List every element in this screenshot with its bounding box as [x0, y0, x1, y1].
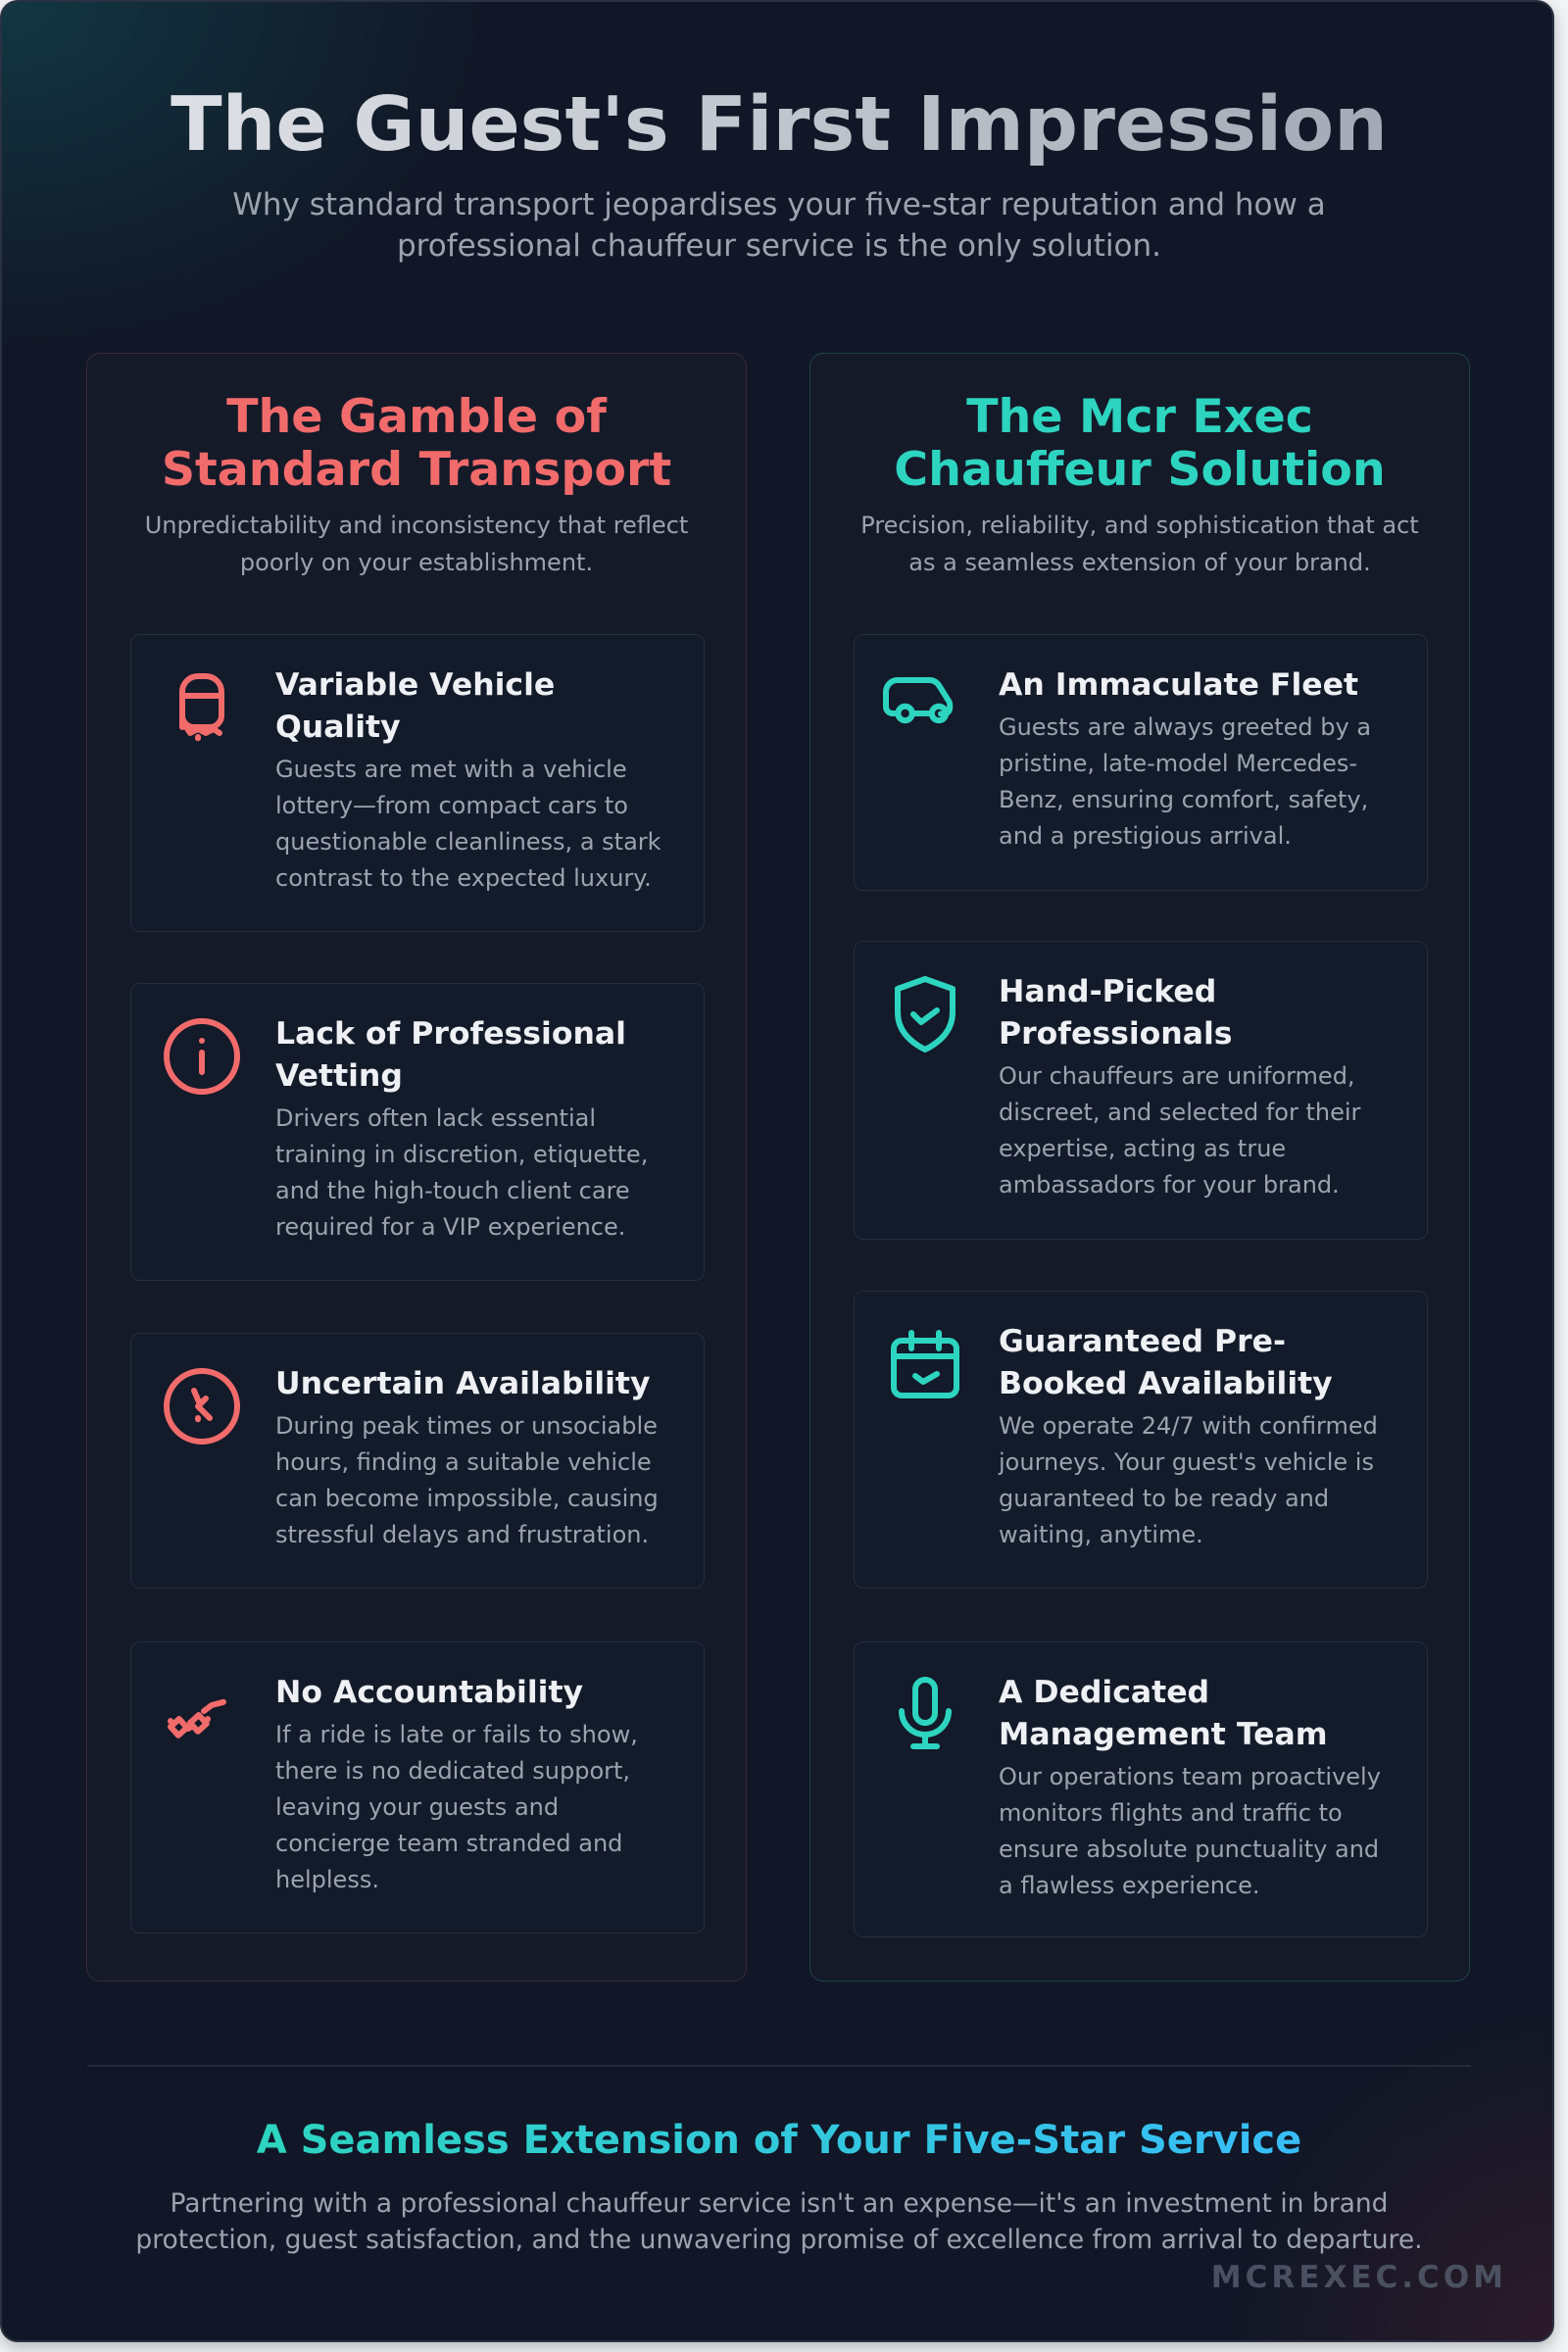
card: pre-booked availability: We operate 24/7 with confirmed journeys. Your guest's vehicle is guaranteed to be ready and waiting, anytime. — [999, 1412, 1378, 1548]
card: management team: A Dedicated Management Team — [999, 1675, 1328, 1752]
card: lack of vetting — [130, 983, 705, 1281]
icon: info circle — [164, 1018, 240, 1095]
card: hand-picked professionals: Hand-Picked Professionals — [999, 974, 1233, 1052]
card: variable vehicle quality: Guests are met with a vehicle lottery—from compact cars to questionable cleanliness, a stark contrast to the expected luxury. — [275, 756, 662, 892]
panel: standard transport — [86, 353, 747, 1982]
panel heading: solution: The Mcr Exec — [966, 390, 1313, 444]
icon: calendar check — [891, 1330, 959, 1398]
card: uncertain availability — [130, 1333, 705, 1589]
footer text: Partnering with a professional chauffeur service isn't an expense—it's an investment in brand protection, guest satisfaction, and the unwavering promise of excellence from arrival to departure. — [135, 2188, 1423, 2255]
icon: microphone — [899, 1677, 952, 1749]
panel subheading: Unpredictability and inconsistency that reflect poorly on your establishment. — [145, 512, 688, 576]
card: immaculate fleet — [854, 634, 1428, 891]
footer heading: A Seamless Extension of Your Five-Star Service — [257, 2118, 1301, 2163]
card: pre-booked availability — [854, 1291, 1428, 1589]
card: no accountability: If a ride is late or fails to show, there is no dedicated support, leaving your guests and concierge team stranded and helpless. — [275, 1721, 638, 1893]
card: no accountability — [130, 1642, 705, 1934]
panel: chauffeur solution — [809, 353, 1470, 1982]
card: uncertain availability: During peak times or unsociable hours, finding a suitable vehicle can become impossible, causing stressful delays and frustration. — [275, 1412, 659, 1548]
card: management team: Our operations team proactively monitors flights and traffic to ensure absolute punctuality and a flawless experience. — [999, 1763, 1381, 1899]
card: immaculate fleet: Guests are always greeted by a pristine, late-model Mercedes-Benz, ensuring comfort, safety, and a prestigious arrival. — [999, 713, 1371, 850]
panel subheading: Precision, reliability, and sophistication that act as a seamless extension of your brand. — [860, 512, 1419, 576]
icon: car — [883, 677, 953, 723]
card: hand-picked professionals — [854, 941, 1428, 1240]
card: management team — [854, 1642, 1428, 1937]
title: The Guest's First Impression — [171, 81, 1388, 169]
icon: broken clock — [164, 1368, 240, 1445]
icon: broken glasses — [168, 1699, 226, 1739]
panel heading: solution: Chauffeur Solution — [894, 443, 1386, 497]
card: uncertain availability: Uncertain Availability — [275, 1366, 651, 1401]
card: pre-booked availability: Guaranteed Pre-Booked Availability — [999, 1324, 1333, 1401]
card: immaculate fleet: An Immaculate Fleet — [999, 667, 1358, 703]
panel heading: gamble: Standard Transport — [162, 443, 671, 497]
card: no accountability: No Accountability — [275, 1675, 583, 1710]
card: lack of vetting: Drivers often lack essential training in discretion, etiquette, and the high-touch client care required for a VIP experience. — [275, 1104, 648, 1241]
card: lack of vetting: Lack of Professional Vetting — [275, 1016, 626, 1094]
card: variable vehicle quality — [130, 634, 705, 932]
panel heading: solution — [894, 390, 1386, 497]
brand watermark: MCREXEC.COM — [1211, 2260, 1507, 2295]
card: variable vehicle quality: Variable Vehicle Quality — [275, 667, 555, 745]
subtitle: Why standard transport jeopardises your five-star reputation and how a professional chauffeur service is the only solution. — [232, 187, 1326, 264]
icon: shield check — [895, 976, 956, 1053]
icon: dirty car front — [179, 673, 224, 741]
panel heading: gamble — [162, 390, 671, 497]
card: hand-picked professionals: Our chauffeurs are uniformed, discreet, and selected for their expertise, acting as true ambassadors for your brand. — [999, 1062, 1360, 1199]
panel heading: gamble: The Gamble of — [226, 390, 607, 444]
